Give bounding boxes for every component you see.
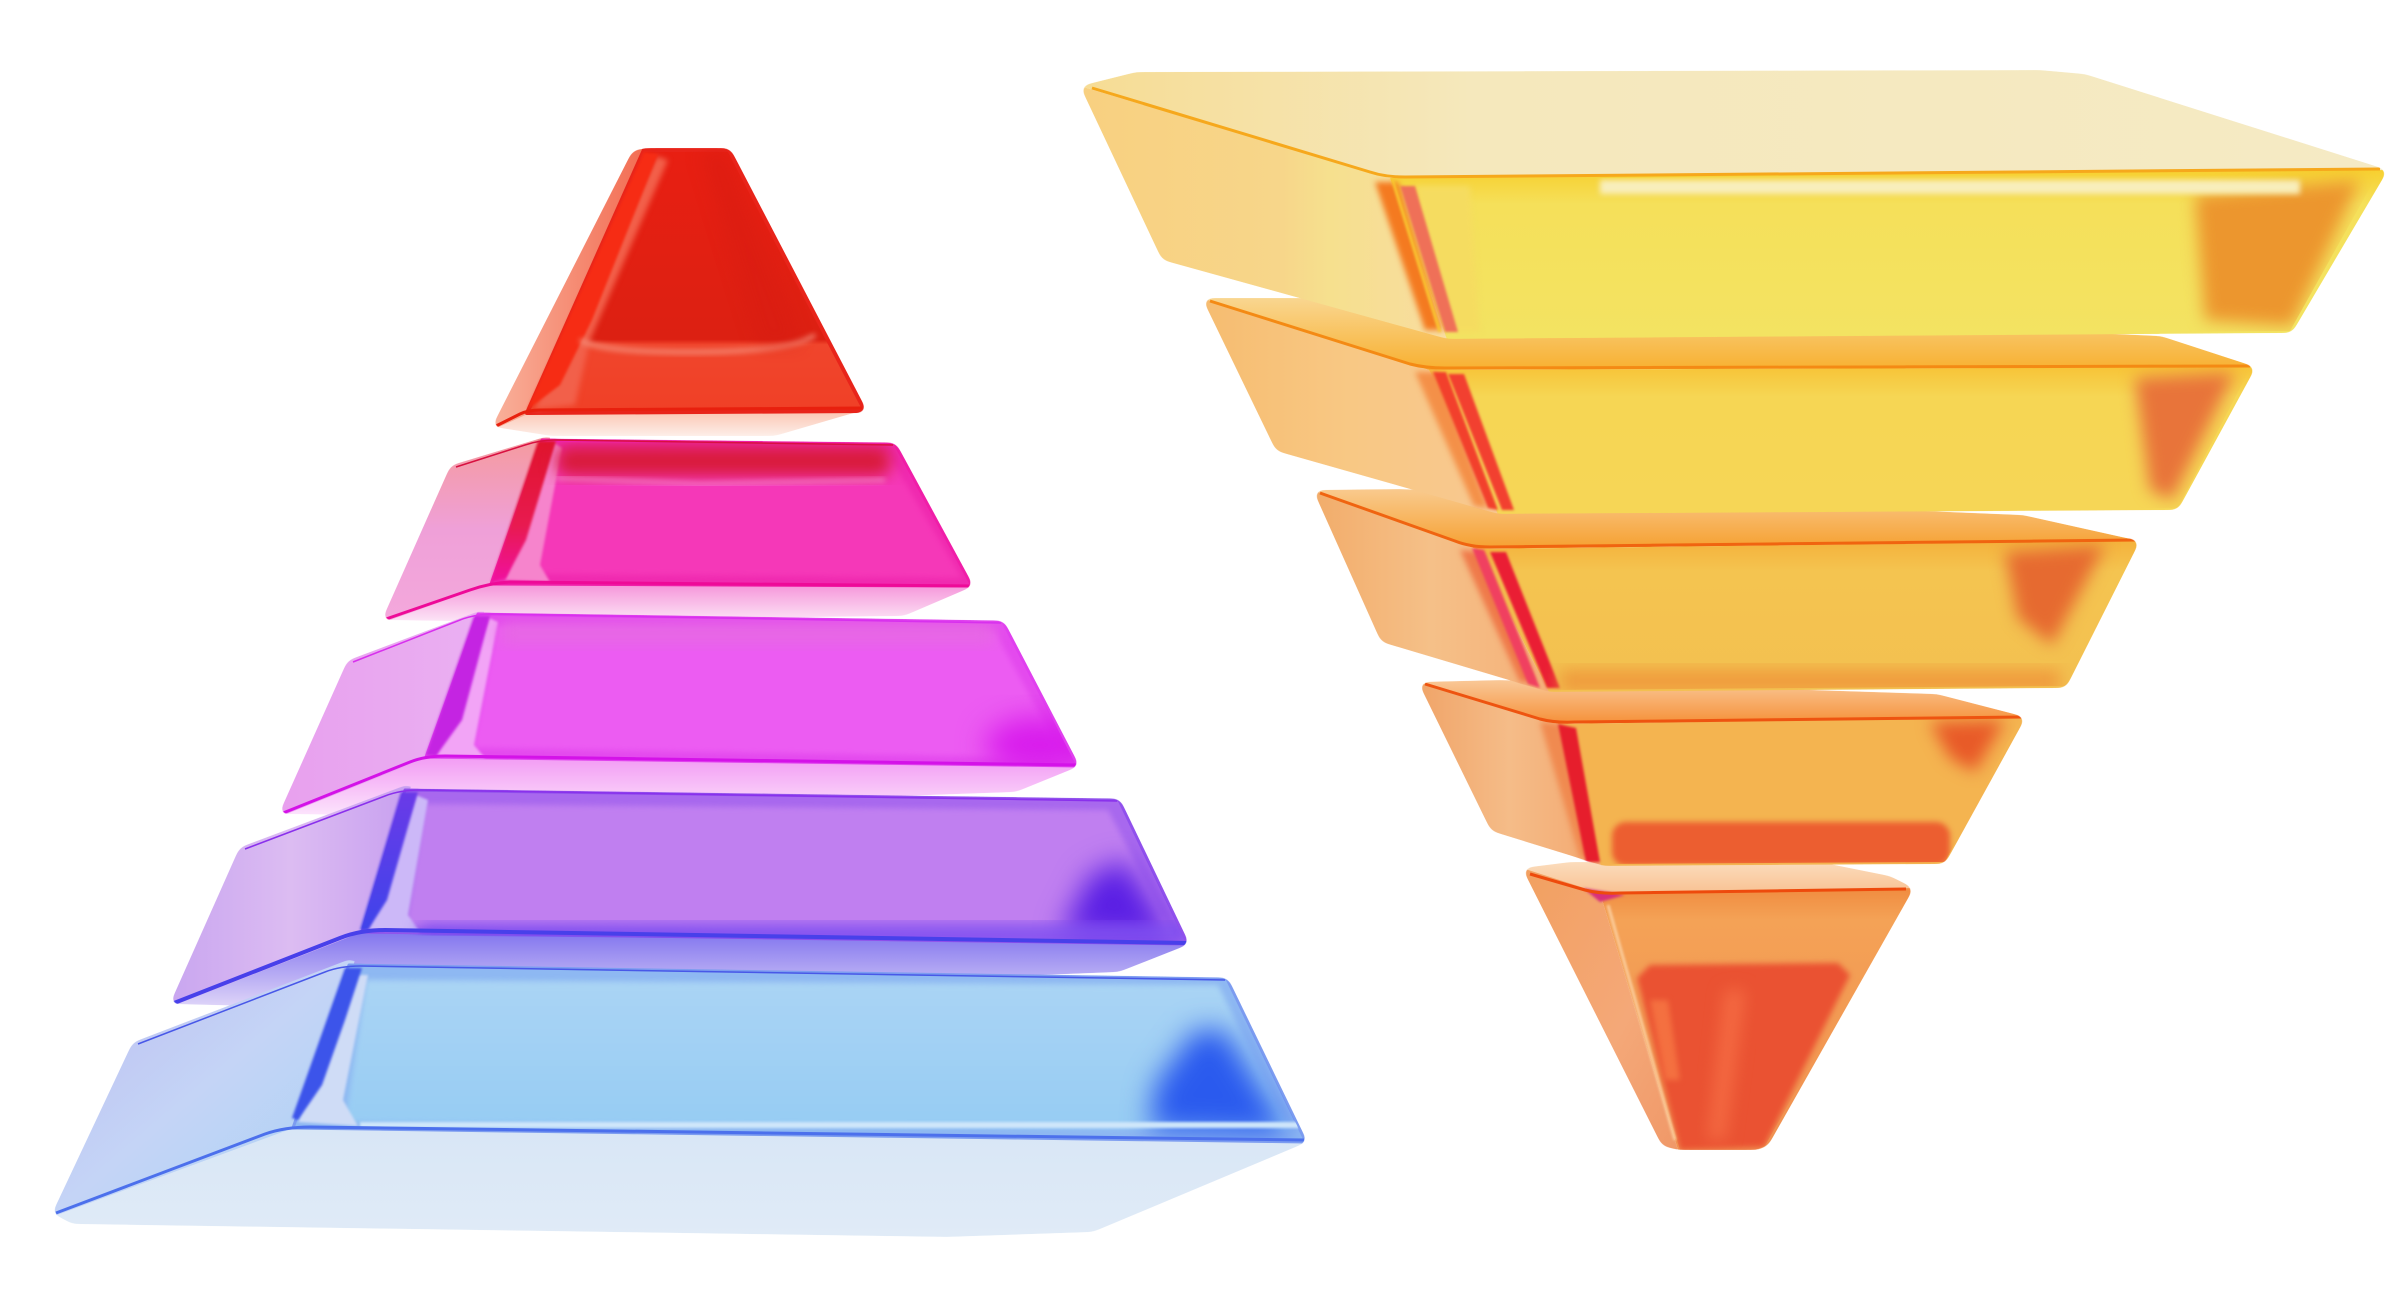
- funnel tier 2: [1202, 298, 2256, 514]
- funnel: [1080, 70, 2388, 1150]
- pyramid tier 1: red: [494, 150, 865, 436]
- funnel tier 4: [1418, 680, 2026, 866]
- funnel tier 3: [1313, 489, 2140, 692]
- pyramid tier 3: magenta: [281, 612, 1095, 815]
- funnel tier 1: yellow: [1080, 70, 2388, 339]
- pyramid tier 5: blue: [54, 960, 1310, 1237]
- funnel tier 5: tip: [1522, 862, 1914, 1150]
- pyramid tier 4: purple: [172, 786, 1190, 1006]
- pyramid: [54, 150, 1310, 1237]
- pyramid tier 2: pink: [384, 438, 974, 621]
